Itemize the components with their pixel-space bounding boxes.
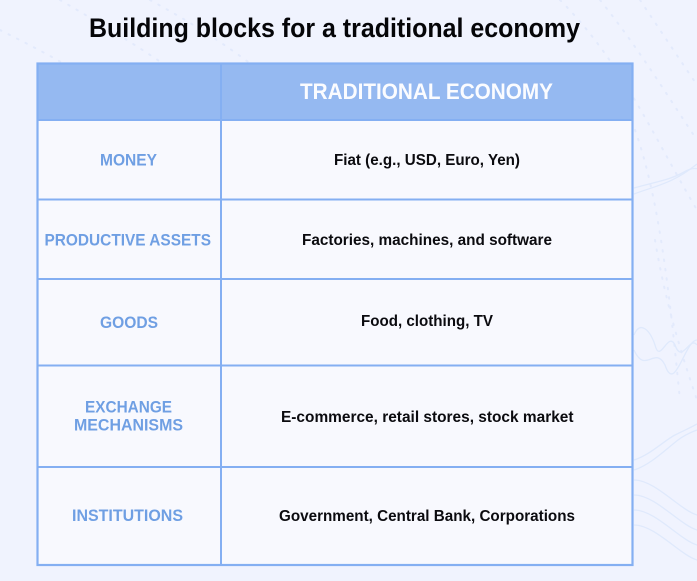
row: exchange mechanisms bbox=[74, 398, 574, 434]
row: money: Fiat (e.g., USD, Euro, Yen) bbox=[334, 152, 520, 169]
row: institutions: INSTITUTIONS bbox=[72, 507, 183, 525]
row: goods: Food, clothing, TV bbox=[361, 313, 494, 330]
table panel bbox=[37, 63, 632, 565]
row: goods bbox=[100, 313, 494, 332]
row: money bbox=[100, 152, 520, 170]
row: exchange mechanisms: EXCHANGE bbox=[85, 398, 172, 416]
row: institutions bbox=[72, 507, 575, 525]
row: institutions: Government, Central Bank, Corporations bbox=[279, 508, 575, 525]
row: money: MONEY bbox=[100, 152, 157, 170]
row: goods: GOODS bbox=[100, 314, 158, 332]
header: traditional economy: TRADITIONAL ECONOMY bbox=[300, 79, 553, 104]
row: productive assets: Factories, machines, and software bbox=[302, 232, 552, 249]
row: exchange mechanisms: E-commerce, retail stores, stock market bbox=[281, 409, 574, 426]
title: Building blocks for a traditional economy bbox=[89, 13, 580, 43]
table body background bbox=[37, 63, 632, 565]
row: productive assets: PRODUCTIVE ASSETS bbox=[44, 232, 211, 250]
table header row bbox=[37, 63, 632, 120]
row: productive assets bbox=[44, 232, 552, 250]
row: exchange mechanisms: MECHANISMS bbox=[74, 416, 183, 434]
